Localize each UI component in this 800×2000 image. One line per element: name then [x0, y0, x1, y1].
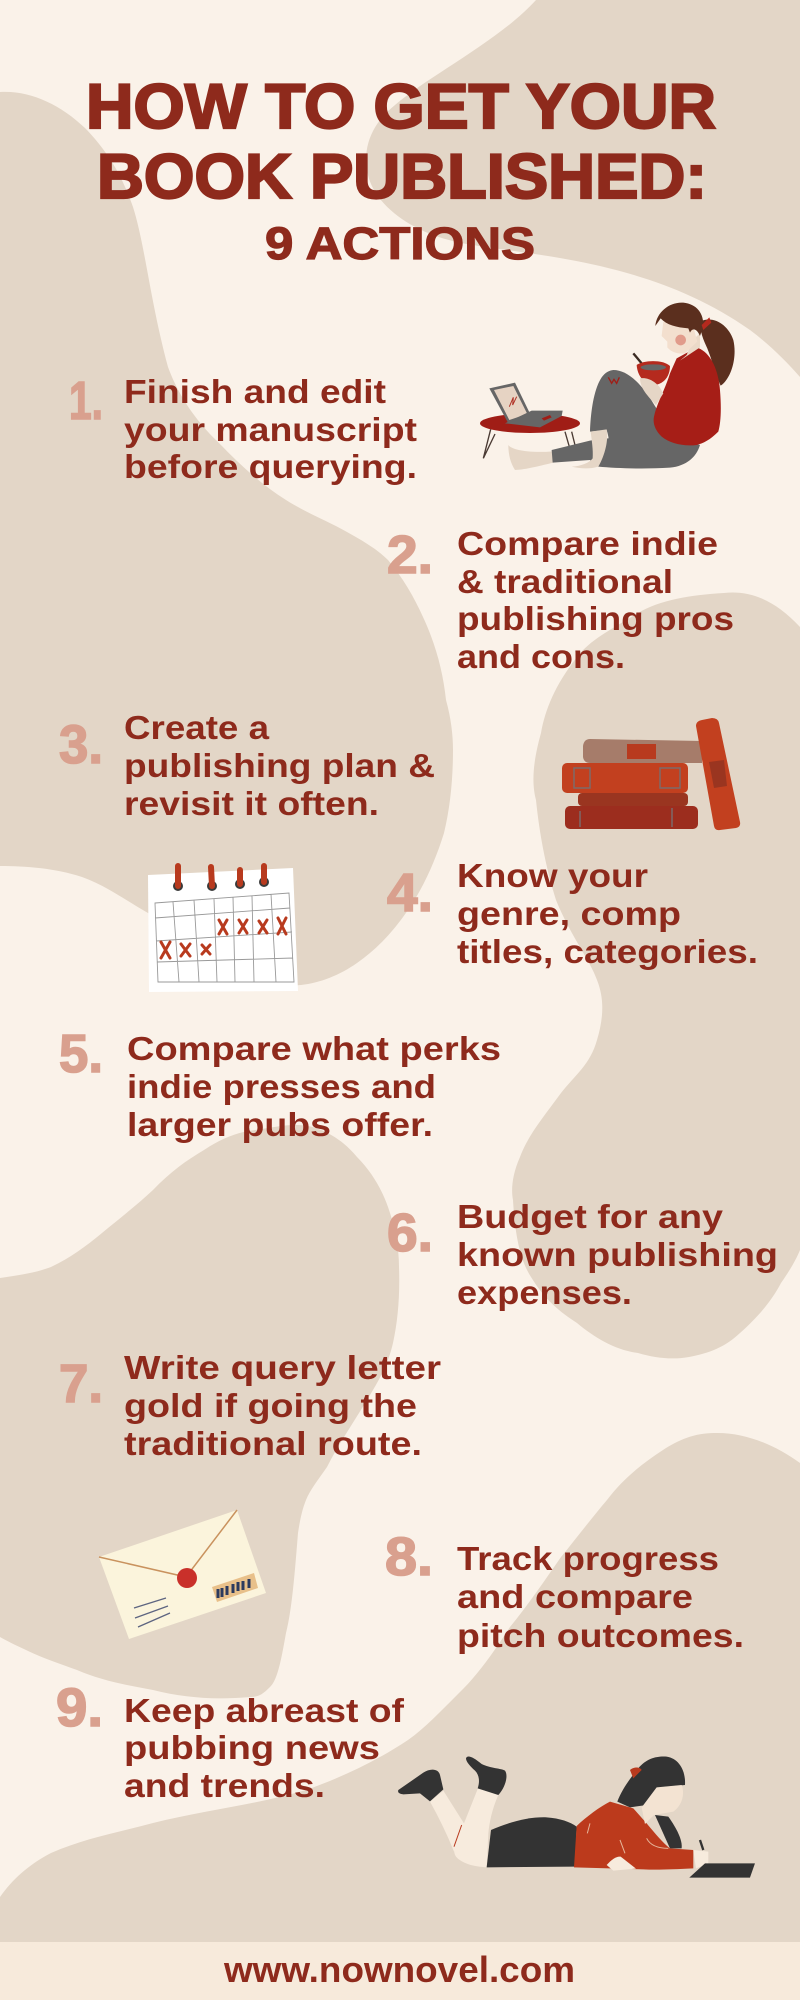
step 6 text: expenses.: [457, 1275, 632, 1312]
number 5: 5.: [59, 1024, 103, 1084]
step 2 text: publishing pros: [457, 601, 734, 638]
number 8: 8.: [385, 1527, 433, 1587]
calendar crosses: [161, 918, 286, 958]
step 4 text: titles, categories.: [457, 934, 758, 971]
step 2 text: and cons.: [457, 639, 625, 676]
title: HOW TO GET YOUR: [86, 72, 716, 142]
step 5: [59, 1024, 501, 1144]
step 4 text: genre, comp: [457, 896, 681, 933]
step 6 text: [457, 1199, 778, 1312]
step 8 text: and compare: [457, 1579, 693, 1616]
step 8: [385, 1527, 744, 1655]
step 6 text: Budget for any: [457, 1199, 723, 1236]
step 8 text: [457, 1541, 744, 1655]
step 7 text: [124, 1350, 441, 1463]
step 8 text: Track progress: [457, 1541, 719, 1578]
calendar rings: [173, 866, 269, 891]
step 9 text: [124, 1693, 405, 1805]
number 1: 1.: [69, 371, 103, 431]
step 8 text: pitch outcomes.: [457, 1618, 744, 1655]
step 9: [56, 1678, 405, 1805]
title: BOOK PUBLISHED:: [97, 142, 707, 212]
step 6: [387, 1199, 778, 1312]
number 3: 3.: [59, 715, 103, 775]
step 4 text: Know your: [457, 858, 648, 895]
step 1 text: [124, 374, 417, 486]
number 9: 9.: [56, 1678, 103, 1738]
step 7 text: gold if going the: [124, 1388, 417, 1425]
step 7: [59, 1350, 441, 1463]
step 7 text: traditional route.: [124, 1426, 422, 1463]
number 2: 2.: [387, 525, 433, 585]
title: [86, 72, 716, 269]
icon: calendar: [148, 866, 298, 992]
step 9 text: pubbing news: [124, 1730, 380, 1767]
number 4: 4.: [387, 863, 433, 923]
icon: envelope: [99, 1510, 266, 1639]
step 9 text: Keep abreast of: [124, 1693, 405, 1730]
step 5 text: indie presses and: [127, 1069, 436, 1106]
step 5 text: Compare what perks: [127, 1031, 501, 1068]
footer band: [0, 1942, 800, 2000]
step 1 text: your manuscript: [124, 412, 417, 449]
number 7: 7.: [59, 1354, 103, 1414]
website url: www.nownovel.com: [223, 1949, 575, 1990]
step 9 text: and trends.: [124, 1768, 325, 1805]
icon: stack of books: [562, 718, 740, 830]
step 1 text: Finish and edit: [124, 374, 386, 411]
title: 9 ACTIONS: [265, 218, 535, 269]
step 7 text: Write query letter: [124, 1350, 441, 1387]
step 3 text: publishing plan &: [124, 748, 435, 785]
step 4: [387, 858, 758, 971]
step 3 text: [124, 710, 435, 823]
step 2: [387, 525, 734, 676]
step 3 text: Create a: [124, 710, 269, 747]
icon: woman sitting with laptop and bowl: [480, 303, 735, 470]
step 5 text: [127, 1031, 501, 1144]
number 6: 6.: [387, 1203, 433, 1263]
step 2 text: Compare indie: [457, 526, 718, 563]
step 1 text: before querying.: [124, 449, 417, 486]
step 2 text: [457, 526, 734, 676]
step 5 text: larger pubs offer.: [127, 1107, 433, 1144]
step 6 text: known publishing: [457, 1237, 778, 1274]
step 2 text: & traditional: [457, 564, 673, 601]
step 3 text: revisit it often.: [124, 786, 379, 823]
icon: woman lying down writing: [398, 1757, 755, 1878]
step 4 text: [457, 858, 758, 971]
step 1: [69, 371, 417, 486]
step 3: [59, 710, 435, 823]
